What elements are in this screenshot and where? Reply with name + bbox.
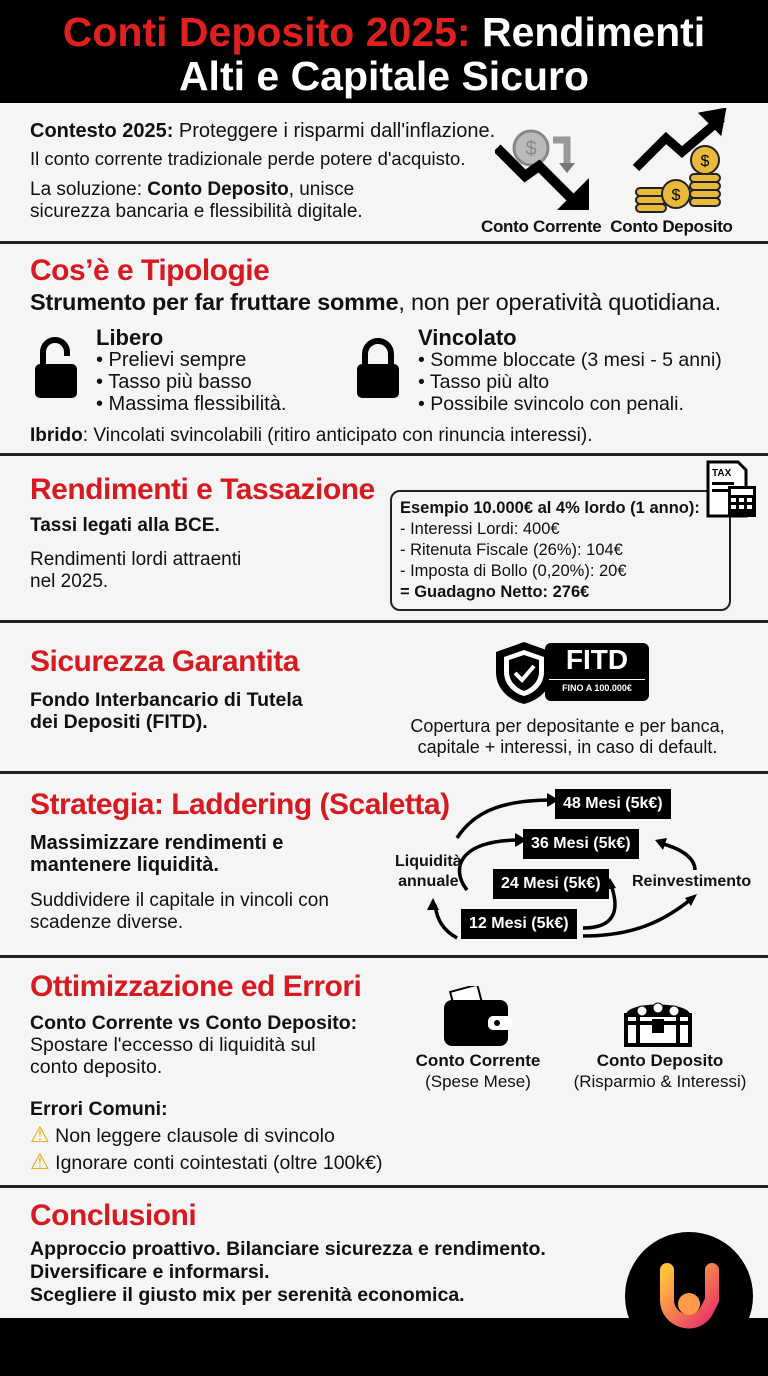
icon captions: Conto Corrente	[416, 1051, 540, 1070]
box 36: 36 Mesi (5k€)	[531, 835, 631, 852]
panel: vincolato: Vincolato	[418, 325, 517, 350]
text laddering: Suddividere il capitale in vincoli con	[30, 890, 329, 911]
text FITD	[30, 689, 303, 733]
icon: falling arrow: $	[525, 138, 537, 160]
text FITD: Fondo Interbancario di Tutela	[30, 689, 303, 711]
icon: tax calculator: TAX	[712, 468, 732, 479]
ibrido: Ibrido: Vincolati svincolabili (ritiro anticipato con rinuncia interessi).	[30, 425, 592, 446]
panel: vincolato	[418, 325, 722, 415]
panel: libero: • Prelievi sempre	[96, 349, 246, 371]
panel: vincolato: • Somme bloccate (3 mesi - 5 anni)	[418, 349, 722, 371]
tax example box: = Guadagno Netto: 276€	[400, 583, 589, 601]
text copertura: capitale + interessi, in caso di default.	[418, 737, 717, 757]
icon: rising arrow coins	[632, 108, 726, 213]
text cc vs cd: Spostare l'eccesso di liquidità sul	[30, 1034, 316, 1056]
icon: open lock	[35, 337, 77, 398]
text conclusioni: Approccio proattivo. Bilanciare sicurezza e rendimento.	[30, 1238, 546, 1260]
text: Conto Deposito	[597, 1051, 723, 1070]
title	[0, 0, 768, 103]
text copertura: Copertura per depositante e per banca,	[410, 716, 725, 736]
heading: conclusioni: Conclusioni	[30, 1199, 196, 1232]
icon: rising arrow coins: $	[672, 187, 681, 204]
intro text: La soluzione: Conto Deposito, unisce	[30, 179, 354, 200]
text laddering: scadenze diverse.	[30, 912, 183, 933]
text cc vs cd: Conto Corrente vs Conto Deposito:	[30, 1012, 357, 1034]
panel: libero	[96, 325, 286, 415]
text rendimenti	[30, 515, 241, 592]
text laddering: mantenere liquidità.	[30, 854, 219, 876]
icon captions	[416, 1051, 540, 1091]
text conclusioni	[30, 1238, 546, 1306]
icon captions: (Spese Mese)	[425, 1072, 531, 1091]
icon: treasure chest	[624, 1002, 692, 1047]
text FITD: dei Depositi (FITD).	[30, 711, 208, 733]
heading: ottimizzazione: Ottimizzazione ed Errori	[30, 970, 361, 1003]
icon: closed lock	[357, 338, 399, 398]
badge FITD	[496, 642, 649, 704]
ladder diagram: Reinvestimento	[632, 873, 751, 890]
errori comuni: ⚠ Non leggere clausole di svincolo	[30, 1122, 335, 1147]
icon: wallet	[444, 986, 512, 1046]
panel: libero: Libero	[96, 325, 163, 350]
text cc vs cd: conto deposito.	[30, 1056, 162, 1078]
icon: tax calculator	[706, 460, 756, 518]
panel: vincolato: • Tasso più alto	[418, 371, 549, 393]
ladder diagram: Liquidità	[395, 853, 462, 870]
box 36	[523, 829, 639, 859]
badge FITD: FITD	[566, 644, 628, 675]
text laddering	[30, 832, 329, 933]
errori comuni	[30, 1098, 382, 1174]
text rendimenti: nel 2025.	[30, 571, 108, 592]
intro text: Il conto corrente tradizionale perde potere d'acquisto.	[30, 148, 465, 169]
logo	[625, 1232, 753, 1328]
heading: sicurezza: Sicurezza Garantita	[30, 645, 299, 678]
text copertura	[410, 716, 725, 757]
heading: rendimenti: Rendimenti e Tassazione	[30, 473, 375, 506]
heading: cos'è: Cos’è e Tipologie	[30, 254, 269, 287]
icon labels: Conto Corrente Conto Deposito	[481, 217, 733, 236]
intro text	[30, 120, 495, 222]
text: (Risparmio & Interessi)	[574, 1072, 746, 1091]
tax example box: - Interessi Lordi: 400€	[400, 520, 560, 538]
intro text: Contesto 2025: Proteggere i risparmi dall'inflazione.	[30, 120, 495, 142]
text cc vs cd	[30, 1012, 357, 1078]
ladder diagram: annuale	[398, 873, 459, 890]
box 48: 48 Mesi (5k€)	[563, 795, 663, 812]
panel: libero: • Massima flessibilità.	[96, 393, 286, 415]
heading: laddering: Strategia: Laddering (Scaletta)	[30, 788, 450, 821]
ladder diagram	[395, 793, 751, 940]
tax example box: - Ritenuta Fiscale (26%): 104€	[400, 541, 623, 559]
panel: libero: • Tasso più basso	[96, 371, 252, 393]
box 12	[461, 909, 577, 939]
text laddering: Massimizzare rendimenti e	[30, 832, 283, 854]
title: Alti e Capitale Sicuro	[179, 53, 589, 99]
text rendimenti: Tassi legati alla BCE.	[30, 515, 220, 536]
title: Conti Deposito 2025: Rendimenti	[63, 9, 705, 55]
icon: rising arrow coins: $	[701, 153, 710, 170]
tax example box: Esempio 10.000€ al 4% lordo (1 anno):	[400, 499, 700, 517]
badge FITD: FINO A 100.000€	[562, 683, 632, 693]
tax example box: - Imposta di Bollo (0,20%): 20€	[400, 562, 627, 580]
text conclusioni: Scegliere il giusto mix per serenità economica.	[30, 1284, 465, 1306]
subtitle: Strumento per far fruttare somme, non per operatività quotidiana.	[30, 289, 721, 315]
intro text: sicurezza bancaria e flessibilità digitale.	[30, 201, 363, 222]
box 24: 24 Mesi (5k€)	[501, 875, 601, 892]
errori comuni: Errori Comuni:	[30, 1098, 168, 1120]
icon: falling arrow	[495, 130, 589, 210]
box 24	[493, 869, 609, 899]
tax example box	[390, 490, 731, 611]
footer bar	[0, 1318, 768, 1376]
text conclusioni: Diversificare e informarsi.	[30, 1261, 270, 1283]
text rendimenti: Rendimenti lordi attraenti	[30, 549, 241, 570]
box 12: 12 Mesi (5k€)	[469, 915, 569, 932]
box 48	[555, 789, 671, 819]
errori comuni: ⚠ Ignorare conti cointestati (oltre 100k€)	[30, 1149, 382, 1174]
panel: vincolato: • Possibile svincolo con penali.	[418, 393, 684, 415]
